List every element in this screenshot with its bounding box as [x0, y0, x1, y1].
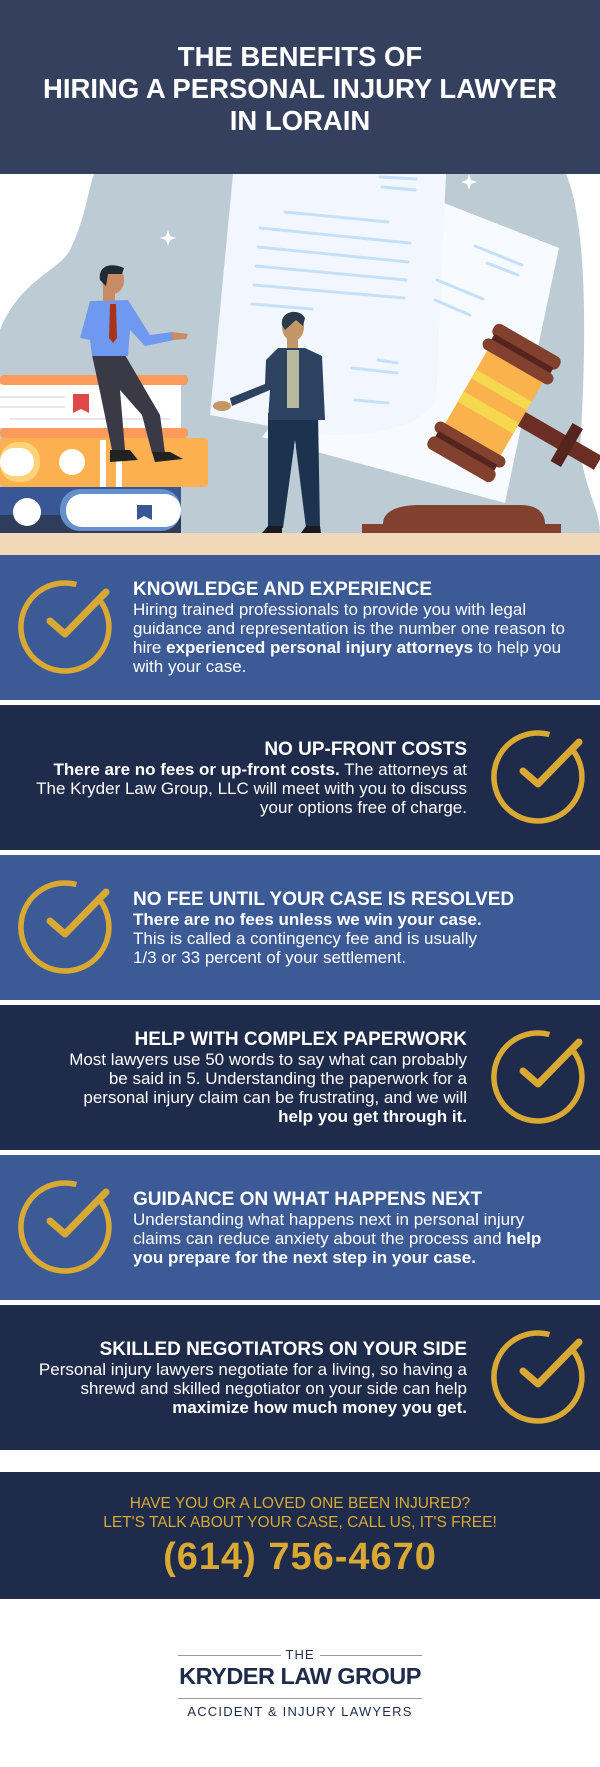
text: costs: There are no fees or up-front costs. The attorneys at [54, 760, 467, 778]
text: paperwork: be said in 5. Understanding the paperwork for a [109, 1069, 467, 1088]
text: costs [36, 738, 467, 816]
icon: check circle [491, 730, 585, 824]
text: knowledge [133, 579, 565, 676]
icon: check circle [491, 1030, 585, 1124]
logo [178, 1647, 422, 1719]
text: paperwork: Most lawyers use 50 words to say what can probably [69, 1050, 467, 1069]
text: no fee: There are no fees unless we win your case. [133, 910, 482, 928]
text: knowledge: guidance and representation is the number one reason to [133, 619, 565, 638]
text: no fee: This is called a contingency fee and is usually [133, 928, 477, 948]
text: guidance: you prepare for the next step in your case. [133, 1248, 476, 1266]
logo: KRYDER LAW GROUP [179, 1663, 421, 1689]
text: no fee [133, 888, 514, 966]
text: guidance: Understanding what happens next in personal injury [133, 1210, 524, 1228]
cta text [103, 1495, 497, 1531]
text: guidance: claims can reduce anxiety about the process and help [133, 1228, 541, 1248]
text: paperwork: personal injury claim can be frustrating, and we will [83, 1088, 467, 1107]
header [0, 0, 600, 174]
panel: guidance [0, 1155, 600, 1300]
text: knowledge: hire experienced personal injury attorneys to help you [133, 638, 561, 657]
text: negotiators: Personal injury lawyers negotiate for a living, so having a [39, 1360, 467, 1378]
man standing [213, 312, 325, 540]
icon: check circle [18, 1180, 112, 1274]
gavel [362, 321, 600, 537]
title: IN LORAIN [230, 105, 370, 136]
papers [160, 174, 559, 503]
icon: check circle [491, 1330, 585, 1424]
man sitting [80, 265, 188, 462]
text: costs: The Kryder Law Group, LLC will meet with you to discuss [36, 778, 467, 798]
floor [0, 533, 600, 555]
icon: check circle [18, 880, 112, 974]
logo: THE [286, 1647, 314, 1662]
text: guidance: GUIDANCE ON WHAT HAPPENS NEXT [133, 1188, 482, 1210]
icon: check circle [18, 580, 112, 674]
text: paperwork: HELP WITH COMPLEX PAPERWORK [134, 1029, 467, 1050]
text: negotiators [39, 1338, 467, 1416]
illustration [0, 174, 600, 555]
logo: ACCIDENT & INJURY LAWYERS [187, 1704, 413, 1719]
text: no fee: 1/3 or 33 percent of your settlement. [133, 948, 406, 966]
panel: no up-front costs [0, 705, 600, 850]
title: HIRING A PERSONAL INJURY LAWYER [43, 73, 557, 104]
books [0, 375, 208, 533]
title: THE BENEFITS OF [178, 41, 422, 72]
phone number: (614) 756-4670 [163, 1536, 437, 1578]
text: knowledge: KNOWLEDGE AND EXPERIENCE [133, 579, 432, 600]
call to action [0, 1472, 600, 1599]
text: costs: NO UP-FRONT COSTS [264, 738, 467, 760]
panel: negotiators [0, 1305, 600, 1450]
text: negotiators: SKILLED NEGOTIATORS ON YOUR SIDE [100, 1338, 467, 1360]
panel: no fee until resolved [0, 855, 600, 1000]
text: costs: your options free of charge. [260, 798, 467, 816]
cta text: HAVE YOU OR A LOVED ONE BEEN INJURED? [130, 1495, 470, 1512]
panel: paperwork [0, 1005, 600, 1150]
text: negotiators: shrewd and skilled negotiator on your side can help [80, 1378, 467, 1398]
text: negotiators: maximize how much money you get. [172, 1398, 467, 1416]
title [43, 41, 557, 136]
text: paperwork [69, 1029, 467, 1126]
text: knowledge: Hiring trained professionals to provide you with legal [133, 600, 526, 619]
text: guidance [133, 1188, 541, 1266]
text: no fee: NO FEE UNTIL YOUR CASE IS RESOLVED [133, 888, 514, 910]
text: knowledge: with your case. [133, 657, 246, 676]
cta text: LET'S TALK ABOUT YOUR CASE, CALL US, IT'S FREE! [103, 1514, 497, 1531]
text: paperwork: help you get through it. [278, 1107, 467, 1126]
panel: knowledge and experience [0, 555, 600, 700]
